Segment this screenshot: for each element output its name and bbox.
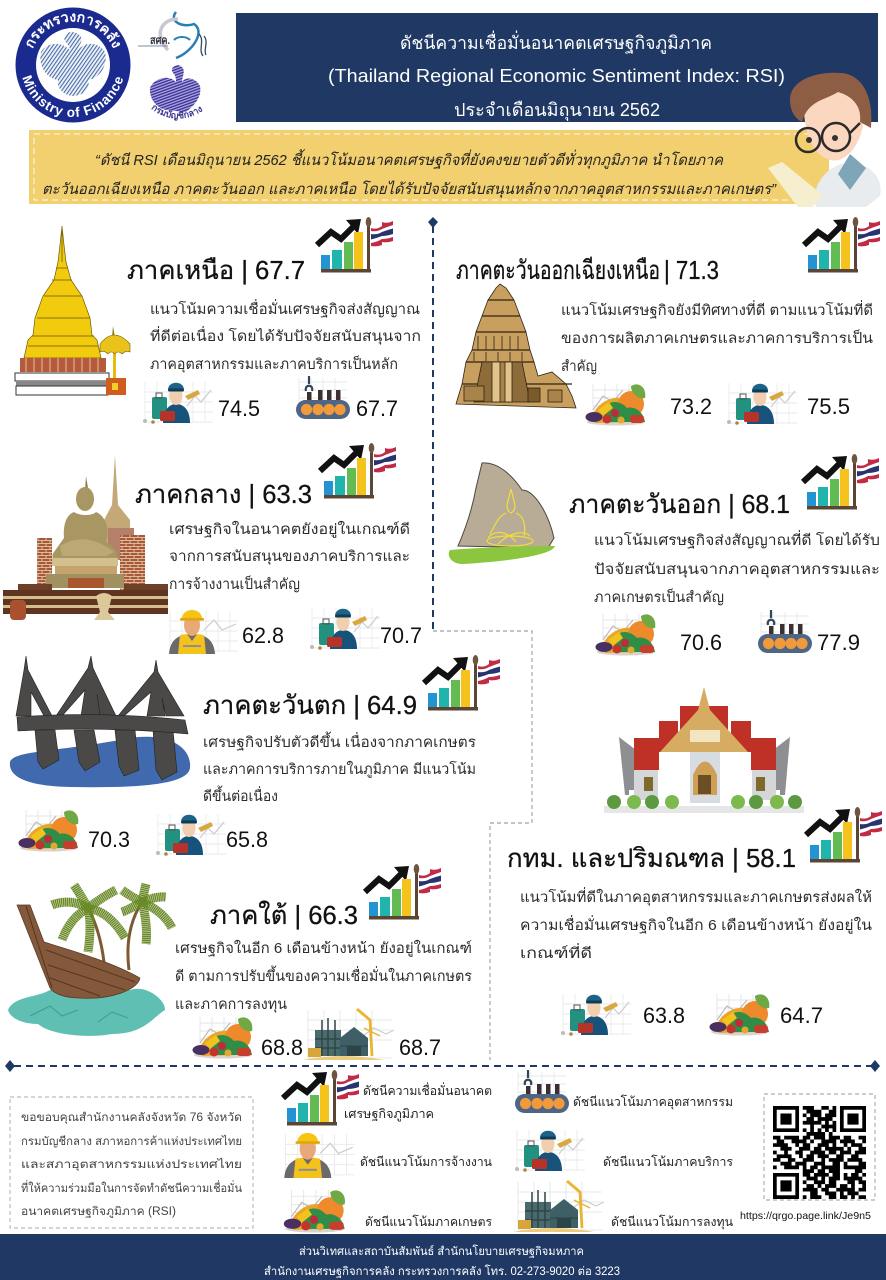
value: agriculture: 70.6 [680, 630, 722, 655]
acknowledgement text: อนาคตเศรษฐกิจภูมิภาค (RSI) [21, 1205, 176, 1218]
description [169, 520, 410, 593]
illustration: golden stupa [15, 226, 130, 395]
description: แนวโน้มเศรษฐกิจส่งสัญญาณที่ดี โดยได้รับ [594, 530, 880, 549]
panel: Central [3, 443, 422, 654]
acknowledgement text: และสภาอุตสาหกรรมแห่งประเทศไทย [21, 1158, 242, 1171]
icon: index chart [803, 454, 879, 510]
value: services: 65.8 [226, 827, 268, 852]
heading: ภาคตะวันตก | 64.9 [203, 690, 417, 720]
logo: FPO swirl: สศค. [150, 35, 170, 47]
panel: North [15, 217, 421, 424]
value: agriculture: 64.7 [780, 1003, 823, 1028]
QR code [740, 1094, 875, 1222]
heading: กทม. และปริมณฑล | 58.1 [507, 843, 796, 873]
panel: East [449, 454, 880, 656]
description: ความเชื่อมั่นเศรษฐกิจในอีก 6 เดือนข้างหน้า ยังอยู่ใน [520, 915, 872, 934]
footer text: ส่วนวิเทศและสถาบันสัมพันธ์ สำนักนโยบายเศรษฐกิจมหภาค [299, 1244, 584, 1258]
icon: industry [758, 610, 812, 653]
footer [0, 1234, 886, 1280]
value: services: 75.5 [807, 394, 850, 419]
description: แนวโน้มความเชื่อมั่นเศรษฐกิจส่งสัญญาณ [150, 299, 420, 318]
divider: horizontal timeline [5, 1060, 880, 1072]
description: และภาคการบริการภายในภูมิภาค มีแนวโน้ม [203, 760, 476, 778]
heading: | 71.3 [664, 255, 719, 285]
legend label: sentiment index: ดัชนีความเชื่อมั่นอนาคต [363, 1082, 492, 1098]
acknowledgement text: กรมบัญชีกลาง สภาหอการค้าแห่งประเทศไทย [21, 1135, 242, 1148]
divider: vertical timeline [428, 217, 532, 1060]
value: services: 74.5 [218, 396, 260, 421]
legend label: sentiment index [344, 1082, 492, 1122]
description: เศรษฐกิจในอีก 6 เดือนข้างหน้า ยังอยู่ในเกณฑ์ [175, 939, 472, 957]
icon: index chart [365, 864, 441, 920]
header title: (Thailand Regional Economic Sentiment Index: RSI) [328, 66, 785, 86]
icon: index chart [804, 217, 880, 272]
icon: employment [169, 610, 238, 654]
value: agriculture: 68.8 [261, 1035, 303, 1060]
panel: Northeast [456, 217, 880, 426]
legend icon: agriculture [284, 1190, 345, 1232]
header title: ประจำเดือนมิถุนายน 2562 [454, 100, 660, 121]
panel: Bangkok and vicinity [507, 687, 882, 1036]
description [150, 299, 421, 373]
value: services: 63.8 [643, 1003, 685, 1028]
illustration: Marble Temple [604, 687, 804, 813]
summary text: “ดัชนี RSI เดือนมิถุนายน 2562 ชี้แนวโน้มอนาคตเศรษฐกิจที่ยังคงขยายตัวดีทั่วทุกภูมิภาค นำโดยภาค [95, 149, 724, 169]
heading: ภาคใต้ | 66.3 [210, 900, 358, 930]
description: การจ้างงานเป็นสำคัญ [169, 574, 300, 593]
logo: Ministry of Finance seal: กระทรวงการคลัง [26, 13, 120, 48]
description [594, 530, 880, 606]
icon: agriculture [596, 614, 655, 656]
summary text [42, 149, 777, 198]
description: และภาคการลงทุน [175, 997, 287, 1013]
logo: Ministry of Finance seal [16, 8, 130, 122]
acknowledgement text [21, 1111, 242, 1218]
description: แนวโน้มที่ดีในภาคอุตสาหกรรมและภาคเกษตรส่งผลให้ [520, 887, 872, 906]
character: economist with glasses [768, 73, 881, 207]
value: services: 70.7 [380, 623, 422, 648]
value: agriculture: 73.2 [670, 394, 712, 419]
heading: ภาคตะวันออก | 68.1 [569, 489, 790, 519]
header panel [236, 13, 878, 122]
legend label: services: ดัชนีแนวโน้มภาคบริการ [603, 1154, 733, 1169]
illustration: Buddha carved in a rock [449, 463, 555, 564]
description [561, 300, 873, 375]
description: ปัจจัยสนับสนุนจากภาคอุตสาหกรรมและ [594, 562, 880, 578]
icon: index chart [320, 443, 396, 498]
heading: ภาคกลาง | 63.3 [135, 479, 312, 509]
panel: West [10, 655, 500, 856]
header title: ดัชนีความเชื่อมั่นอนาคตเศรษฐกิจภูมิภาค [400, 30, 712, 54]
icon: services [727, 383, 797, 425]
icon: agriculture [710, 994, 769, 1036]
heading: ภาคตะวันออกเฉียงเหนือ [456, 255, 660, 285]
acknowledgement box [10, 1097, 253, 1228]
logo: Ministry of Finance seal: Ministry of Finance [22, 75, 123, 117]
description: จากการสนับสนุนของภาคบริการและ [169, 549, 410, 565]
icon: investment [303, 1009, 394, 1060]
footer text: สำนักงานเศรษฐกิจการคลัง กระทรวงการคลัง โทร. 02-273-9020 ต่อ 3223 [264, 1264, 620, 1278]
icon: agriculture [192, 1017, 252, 1058]
legend label: industry: ดัชนีแนวโน้มภาคอุตสาหกรรม [573, 1094, 733, 1110]
logo: Comptroller General's Department: กรมบัญชีกลาง [151, 105, 202, 121]
description [520, 887, 872, 962]
icon: index chart [317, 217, 393, 272]
value: industry: 67.7 [356, 396, 398, 421]
icon: agriculture [586, 384, 645, 426]
value: agriculture: 70.3 [88, 827, 130, 852]
legend label: sentiment index: เศรษฐกิจภูมิภาค [344, 1107, 434, 1122]
legend icon: services [515, 1130, 585, 1172]
legend icon: investment [513, 1181, 604, 1232]
icon: index chart [806, 807, 882, 862]
description: ที่ดีต่อเนื่อง โดยได้รับปัจจัยสนับสนุนจาก [150, 326, 421, 345]
header title [328, 30, 785, 121]
QR link: https://qrgo.page.link/Je9n5 [740, 1210, 871, 1222]
icon: industry [296, 376, 350, 419]
heading: ภาคเหนือ | 67.7 [127, 255, 305, 285]
value: investment: 68.7 [399, 1035, 441, 1060]
description: เกณฑ์ที่ดี [520, 943, 592, 962]
acknowledgement text: ที่ให้ความร่วมมือในการจัดทำดัชนีความเชื่อมั่น [21, 1180, 242, 1195]
acknowledgement text: ขอขอบคุณสำนักงานคลังจังหวัด 76 จังหวัด [21, 1111, 242, 1124]
illustration: Buddha statue at ruins [3, 455, 168, 620]
summary banner [29, 130, 829, 204]
legend label: employment: ดัชนีแนวโน้มการจ้างงาน [360, 1154, 492, 1169]
legend label: agriculture: ดัชนีแนวโน้มภาคเกษตร [365, 1214, 492, 1229]
logo: Comptroller General's Department [150, 65, 202, 121]
description [203, 731, 476, 805]
description: แนวโน้มเศรษฐกิจยังมีทิศทางที่ดี ตามแนวโน้มที่ดี [561, 300, 873, 319]
description: ดีขึ้นต่อเนื่อง [203, 785, 278, 805]
description: เศรษฐกิจปรับตัวดีขึ้น เนื่องจากภาคเกษตร [203, 731, 476, 751]
summary text: ตะวันออกเฉียงเหนือ ภาคตะวันออก และภาคเหนือ โดยได้รับปัจจัยสนับสนุนหลักจากภาคอุตสาหกรรมและภาคเกษตร” [42, 180, 777, 198]
icon: services [156, 814, 226, 856]
legend icon: industry [515, 1070, 569, 1113]
illustration: Bridge over the river [10, 656, 190, 787]
value: employment: 62.8 [242, 623, 284, 648]
legend [283, 1070, 733, 1232]
icon: services [561, 994, 631, 1036]
legend label: investment: ดัชนีแนวโน้มการลงทุน [611, 1214, 733, 1230]
icon: services [310, 608, 380, 650]
illustration: long-tail boat and palm trees [8, 884, 172, 1036]
description: ภาคเกษตรเป็นสำคัญ [594, 587, 724, 606]
logo: FPO swirl [138, 12, 206, 58]
legend icon: index chart [283, 1070, 359, 1126]
description: ของการผลิตภาคเกษตรและภาคการบริการเป็น [561, 328, 873, 347]
description: ดี ตามการปรับขึ้นของความเชื่อมั่นในภาคเกษตร [175, 965, 472, 985]
description: ภาคอุตสาหกรรมและภาคบริการเป็นหลัก [150, 354, 398, 373]
icon: services [143, 382, 213, 424]
footer text [264, 1244, 620, 1278]
panel: South [8, 864, 472, 1060]
icon: index chart [424, 655, 500, 710]
legend icon: employment [284, 1133, 355, 1178]
description [175, 939, 472, 1013]
value: industry: 77.9 [817, 630, 860, 655]
illustration: Khmer stone temple [456, 284, 576, 408]
description: สำคัญ [561, 359, 597, 375]
description: เศรษฐกิจในอนาคตยังอยู่ในเกณฑ์ดี [169, 520, 410, 538]
icon: agriculture [18, 810, 78, 852]
